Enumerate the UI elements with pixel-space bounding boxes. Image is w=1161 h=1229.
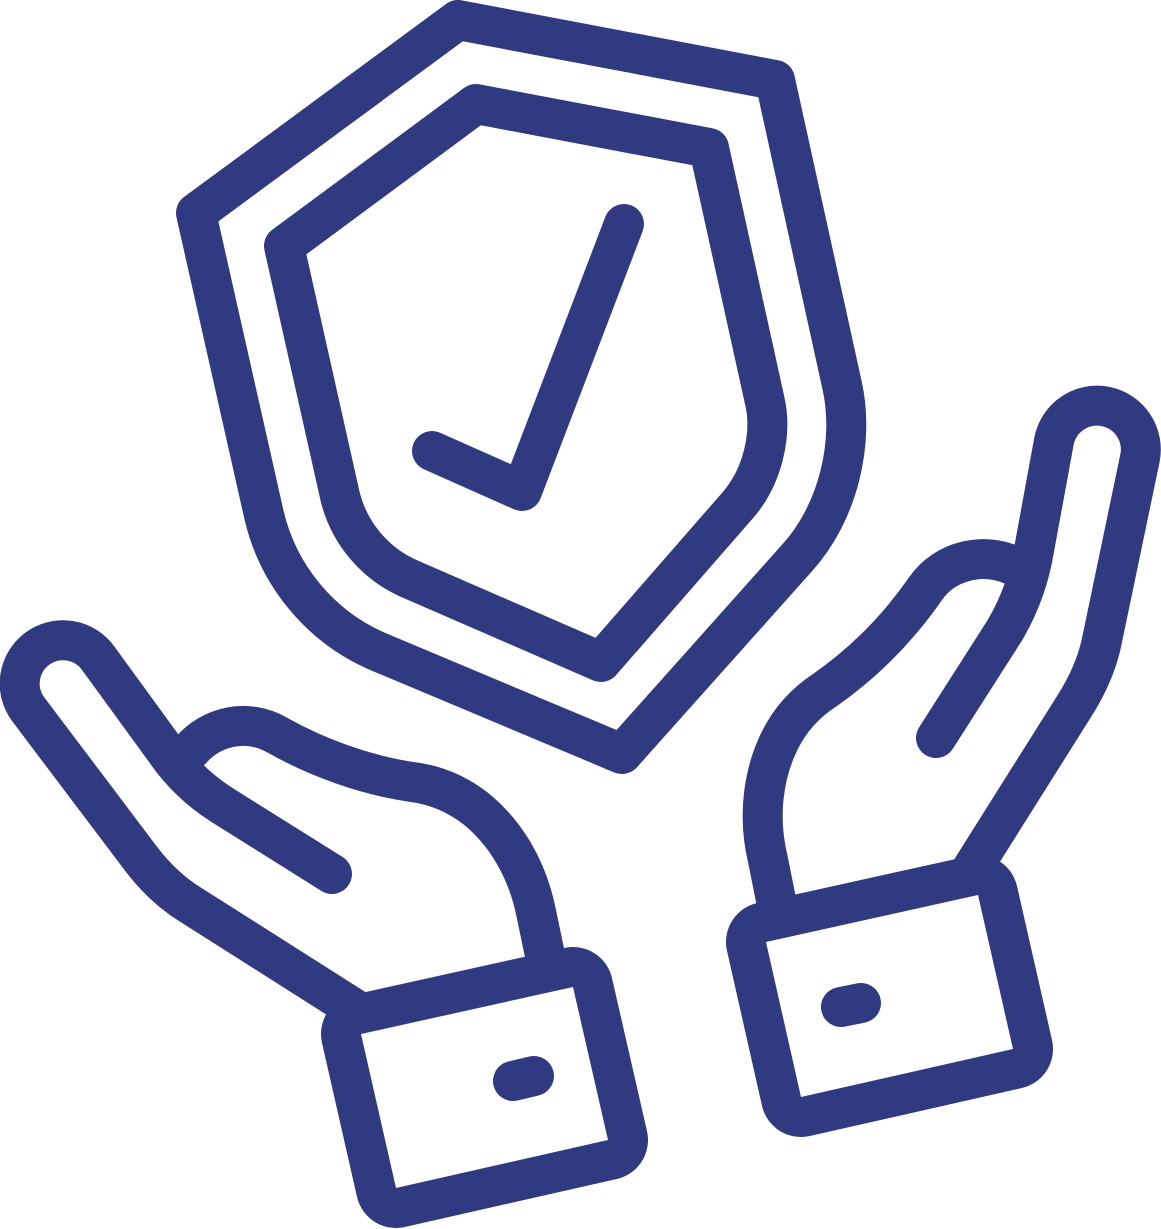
- left hand thumb and palm: [191, 726, 546, 960]
- icon: check mark: [432, 224, 624, 491]
- icon: left hand: [20, 640, 546, 1011]
- icon: outer shield rounded tip: [604, 745, 647, 772]
- icon: left cuff: [361, 987, 608, 1188]
- right hand thumb and palm: [763, 559, 1012, 905]
- icon: inner shield outline: [284, 104, 767, 662]
- icon: right hand: [763, 406, 1141, 905]
- icon: right cuff: [766, 895, 1013, 1097]
- icon: right cuff button: [841, 1003, 861, 1007]
- right hand fingers: [936, 406, 1141, 875]
- icon: left cuff button: [513, 1076, 534, 1081]
- left hand fingers: [20, 640, 358, 1011]
- icon: outer shield outline: [196, 20, 846, 754]
